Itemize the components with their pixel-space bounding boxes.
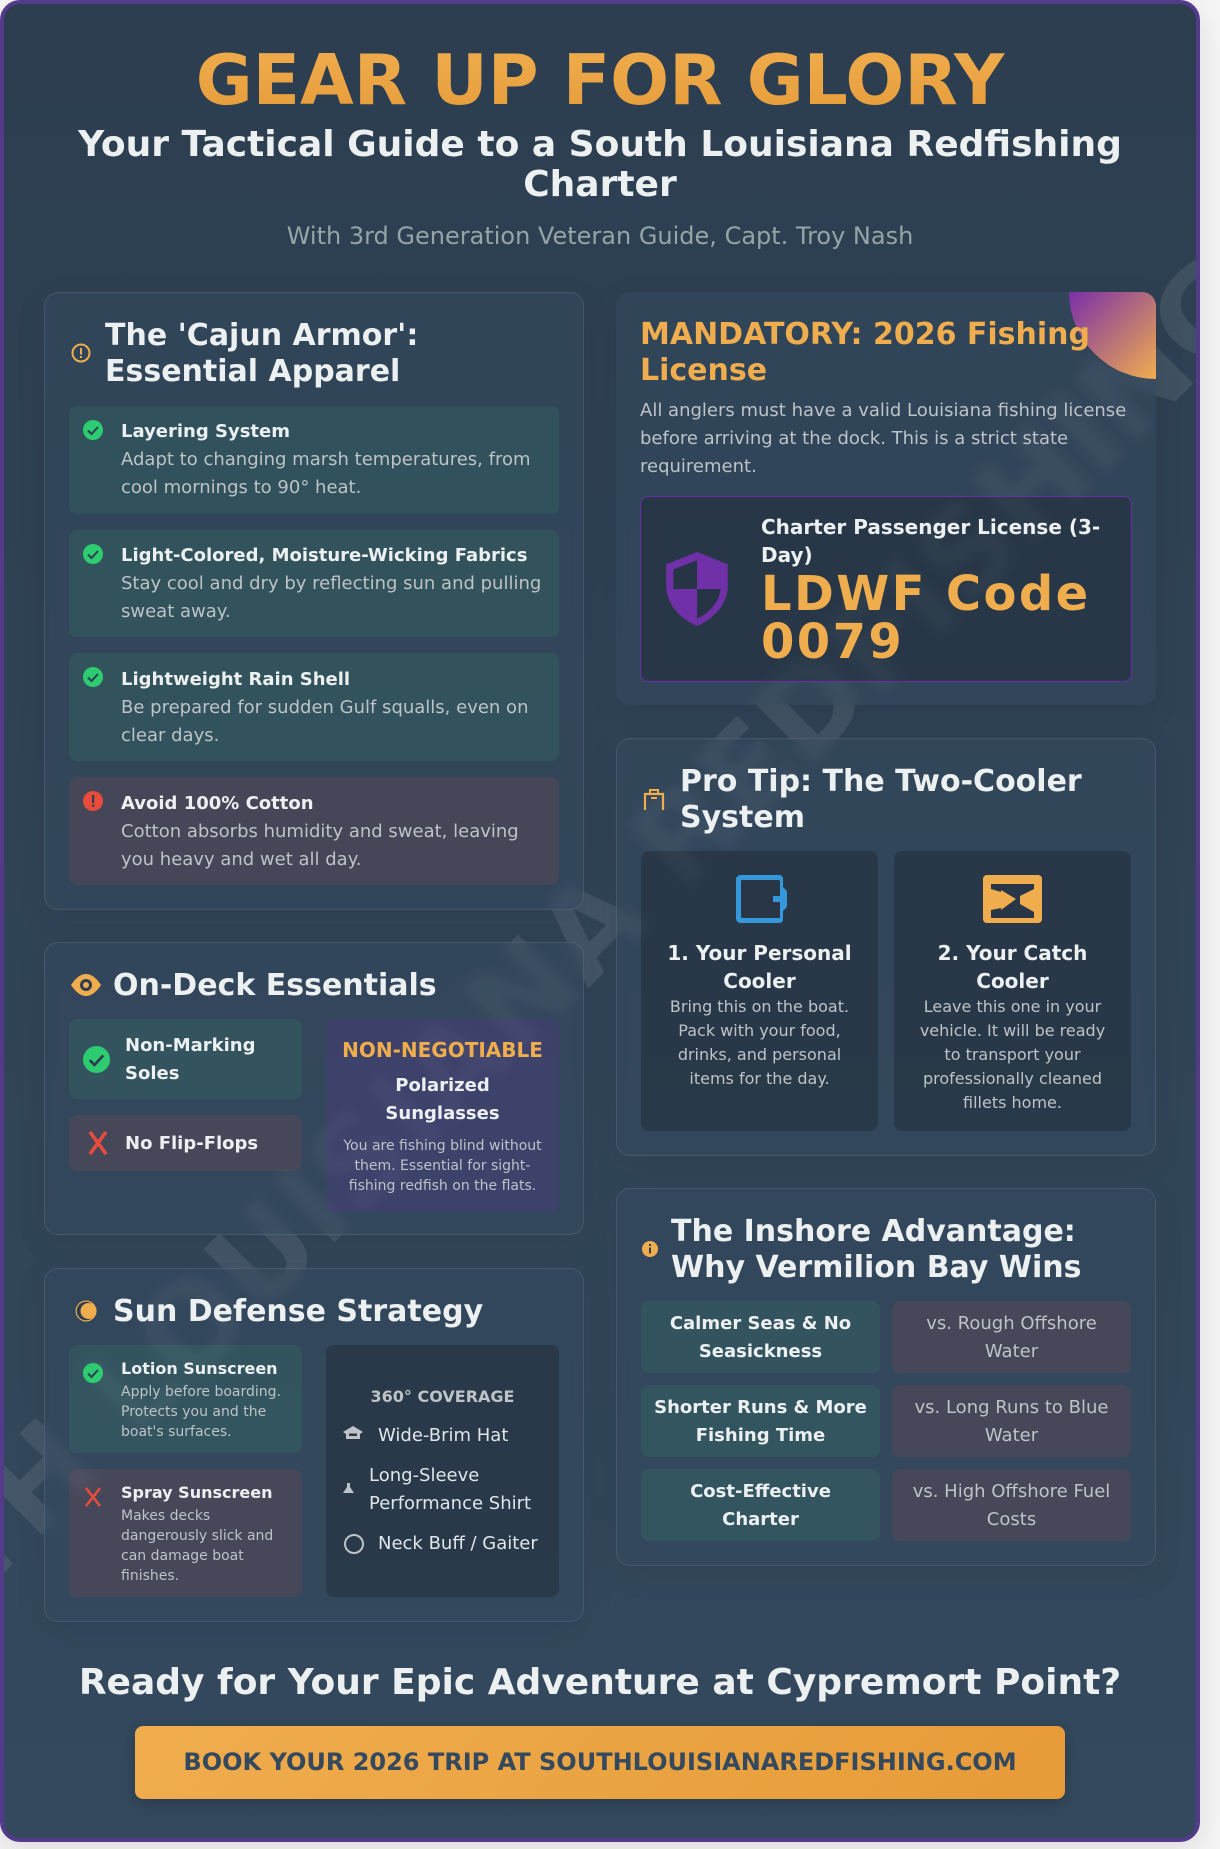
heading: Essential Apparel — [105, 354, 400, 389]
label — [125, 1035, 256, 1084]
decorative corner — [1069, 292, 1156, 379]
description — [343, 1138, 542, 1194]
panel: two-cooler system — [616, 738, 1156, 1156]
text: Spray Sunscreen — [121, 1483, 272, 1502]
header — [78, 41, 1122, 250]
description: fishing redfish on the flats. — [349, 1178, 536, 1194]
text: cool mornings to 90° heat. — [121, 477, 361, 498]
heading — [680, 764, 1082, 835]
label — [369, 1465, 531, 1514]
icon: check — [83, 544, 103, 564]
text: Light-Colored, Moisture-Wicking Fabrics — [121, 545, 527, 566]
text: clear days. — [121, 725, 219, 746]
coverage heading: 360° COVERAGE — [371, 1387, 514, 1406]
badge heading: NON-NEGOTIABLE — [342, 1038, 543, 1062]
call to action heading: Ready for Your Epic Adventure at Cypremort Point? — [79, 1662, 1121, 1703]
license name — [761, 515, 1100, 567]
subtitle: Your Tactical Guide to a South Louisiana Redfishing — [78, 124, 1122, 165]
cooler title — [667, 941, 852, 993]
heading: Sun Defense Strategy — [113, 1294, 483, 1329]
text: Be prepared for sudden Gulf squalls, even on — [121, 697, 528, 718]
label: No Flip-Flops — [125, 1133, 258, 1154]
heading: License — [640, 353, 767, 388]
license code: 0079 — [761, 614, 904, 670]
panel: 360 coverage — [326, 1345, 559, 1597]
icon: check — [83, 1046, 110, 1073]
text — [121, 1358, 281, 1440]
icon: shirt — [343, 1483, 354, 1493]
heading: On-Deck Essentials — [113, 968, 437, 1003]
item: fabrics — [69, 530, 559, 637]
cooler description — [920, 996, 1105, 1112]
subtitle: Charter — [523, 164, 677, 205]
call to action button: BOOK YOUR 2026 TRIP AT SOUTHLOUISIANAREDFISHING.COM — [183, 1748, 1017, 1776]
text: Stay cool and dry by reflecting sun and pulling — [121, 573, 541, 594]
icon: check — [83, 667, 103, 687]
heading: Pro Tip: The Two-Cooler — [680, 764, 1082, 799]
guide credit: With 3rd Generation Veteran Guide, Capt. Troy Nash — [287, 222, 913, 250]
text — [121, 792, 519, 870]
cooler description: Leave this one in your — [924, 996, 1101, 1016]
label: Wide-Brim Hat — [378, 1425, 508, 1446]
panel: sun defense strategy — [44, 1268, 584, 1622]
item name — [385, 1075, 500, 1124]
item: layering system — [69, 406, 559, 514]
description: All anglers must have a valid Louisiana fishing license — [640, 400, 1126, 421]
row 2 advantage — [641, 1385, 880, 1457]
cooler title: 1. Your Personal — [667, 941, 852, 965]
description: them. Essential for sight- — [355, 1158, 530, 1174]
row 3 advantage — [641, 1469, 880, 1541]
row 2 advantage: Shorter Runs & More — [654, 1397, 867, 1418]
text — [121, 669, 528, 746]
description: before arriving at the dock. This is a strict state — [640, 428, 1068, 449]
cooler description: items for the day. — [689, 1068, 830, 1088]
heading: The Inshore Advantage: — [671, 1214, 1076, 1249]
icon: neck buff — [344, 1534, 364, 1554]
row 3 advantage: Cost-Effective — [690, 1481, 831, 1502]
heading: The 'Cajun Armor': — [105, 318, 418, 353]
cooler description: professionally cleaned — [923, 1068, 1102, 1088]
text — [121, 1483, 273, 1584]
icon: check — [83, 1363, 103, 1383]
heading — [105, 318, 418, 389]
row 1 comparison: Water — [985, 1341, 1038, 1362]
text: Adapt to changing marsh temperatures, from — [121, 448, 530, 470]
cooler title: Cooler — [976, 969, 1049, 993]
cooler 1 — [641, 851, 878, 1131]
description: requirement. — [640, 456, 757, 477]
panel: inshore advantage — [616, 1188, 1156, 1566]
row 1 advantage — [641, 1301, 880, 1373]
row 2 comparison — [892, 1385, 1131, 1457]
row 1 comparison: vs. Rough Offshore — [926, 1313, 1097, 1334]
icon: shield — [666, 552, 728, 626]
cooler description: fillets home. — [963, 1092, 1062, 1112]
text: can damage boat — [121, 1548, 244, 1564]
text: sweat away. — [121, 601, 231, 622]
item name: Polarized — [395, 1075, 490, 1096]
label: Soles — [125, 1063, 179, 1084]
icon: eye — [71, 974, 101, 996]
icon: sun — [76, 1300, 96, 1322]
cooler description: Bring this on the boat. — [670, 996, 849, 1016]
label: Long-Sleeve — [369, 1465, 479, 1486]
text: Protects you and the — [121, 1404, 266, 1420]
cooler title: Cooler — [723, 969, 796, 993]
icon: alert circle — [72, 344, 90, 362]
row 2 comparison: vs. Long Runs to Blue — [914, 1397, 1108, 1418]
text: finishes. — [121, 1568, 179, 1584]
text: Apply before boarding. — [121, 1384, 281, 1400]
description — [640, 400, 1126, 477]
label: Performance Shirt — [369, 1493, 531, 1514]
panel: mandatory license — [616, 292, 1156, 705]
item: non-marking soles — [69, 1019, 302, 1099]
label: Non-Marking — [125, 1035, 256, 1056]
text — [121, 545, 541, 622]
item: avoid cotton — [69, 777, 559, 885]
icon: info — [642, 1241, 658, 1257]
cooler 2 — [894, 851, 1131, 1131]
item name: Sunglasses — [385, 1103, 500, 1124]
icon: catch cooler — [983, 875, 1042, 923]
cooler description: vehicle. It will be ready — [920, 1020, 1105, 1040]
text: Layering System — [121, 420, 290, 442]
heading: System — [680, 800, 805, 835]
title: GEAR UP FOR GLORY — [196, 41, 1004, 121]
item: spray sunscreen — [69, 1469, 302, 1597]
text: dangerously slick and — [121, 1528, 273, 1544]
cooler title — [938, 941, 1087, 993]
cooler title: 2. Your Catch — [938, 941, 1087, 965]
text: boat's surfaces. — [121, 1424, 232, 1440]
icon: x — [88, 1131, 108, 1155]
row 3 comparison: Costs — [987, 1509, 1036, 1530]
heading: Why Vermilion Bay Wins — [671, 1250, 1081, 1285]
text: Cotton absorbs humidity and sweat, leaving — [121, 820, 519, 842]
text: Makes decks — [121, 1508, 210, 1524]
cooler description: drinks, and personal — [678, 1044, 841, 1064]
row 3 comparison — [892, 1469, 1131, 1541]
item: rain shell — [69, 653, 559, 761]
license name: Day) — [761, 543, 813, 567]
call to action button — [135, 1726, 1065, 1799]
panel: on-deck essentials — [44, 942, 584, 1235]
item: no flip-flops — [69, 1115, 302, 1171]
row 2 comparison: Water — [985, 1425, 1038, 1446]
license name: Charter Passenger License (3- — [761, 515, 1100, 539]
row 1 advantage: Seasickness — [699, 1341, 822, 1362]
text: Lotion Sunscreen — [121, 1358, 278, 1378]
row 3 comparison: vs. High Offshore Fuel — [913, 1481, 1110, 1502]
row 2 advantage: Fishing Time — [696, 1425, 825, 1446]
text: you heavy and wet all day. — [121, 849, 362, 870]
description: You are fishing blind without — [343, 1138, 542, 1154]
icon: check — [83, 420, 103, 440]
label: Neck Buff / Gaiter — [378, 1533, 538, 1554]
title — [0, 41, 1200, 121]
heading — [671, 1214, 1081, 1286]
cooler description — [670, 996, 849, 1088]
text: Avoid 100% Cotton — [121, 792, 314, 814]
license code box — [640, 496, 1132, 682]
text — [121, 420, 530, 498]
heading: MANDATORY: 2026 Fishing — [640, 317, 1090, 352]
icon: personal cooler — [736, 875, 787, 923]
icon: warning — [83, 791, 103, 811]
subtitle — [78, 124, 1122, 205]
item: lotion sunscreen — [69, 1345, 302, 1453]
panel: non-negotiable sunglasses — [326, 1019, 559, 1212]
icon: x — [85, 1487, 101, 1507]
heading — [640, 317, 1090, 388]
row 3 advantage: Charter — [722, 1509, 799, 1530]
icon: briefcase — [644, 789, 664, 810]
cooler description: to transport your — [944, 1044, 1081, 1064]
cooler description: Pack with your food, — [678, 1020, 841, 1040]
license code — [761, 566, 1091, 670]
icon: hat — [343, 1426, 363, 1439]
text: Lightweight Rain Shell — [121, 669, 350, 690]
row 1 advantage: Calmer Seas & No — [670, 1313, 851, 1334]
row 1 comparison — [892, 1301, 1131, 1373]
license code: LDWF Code — [761, 566, 1091, 622]
panel: Cajun Armor apparel — [44, 292, 584, 910]
